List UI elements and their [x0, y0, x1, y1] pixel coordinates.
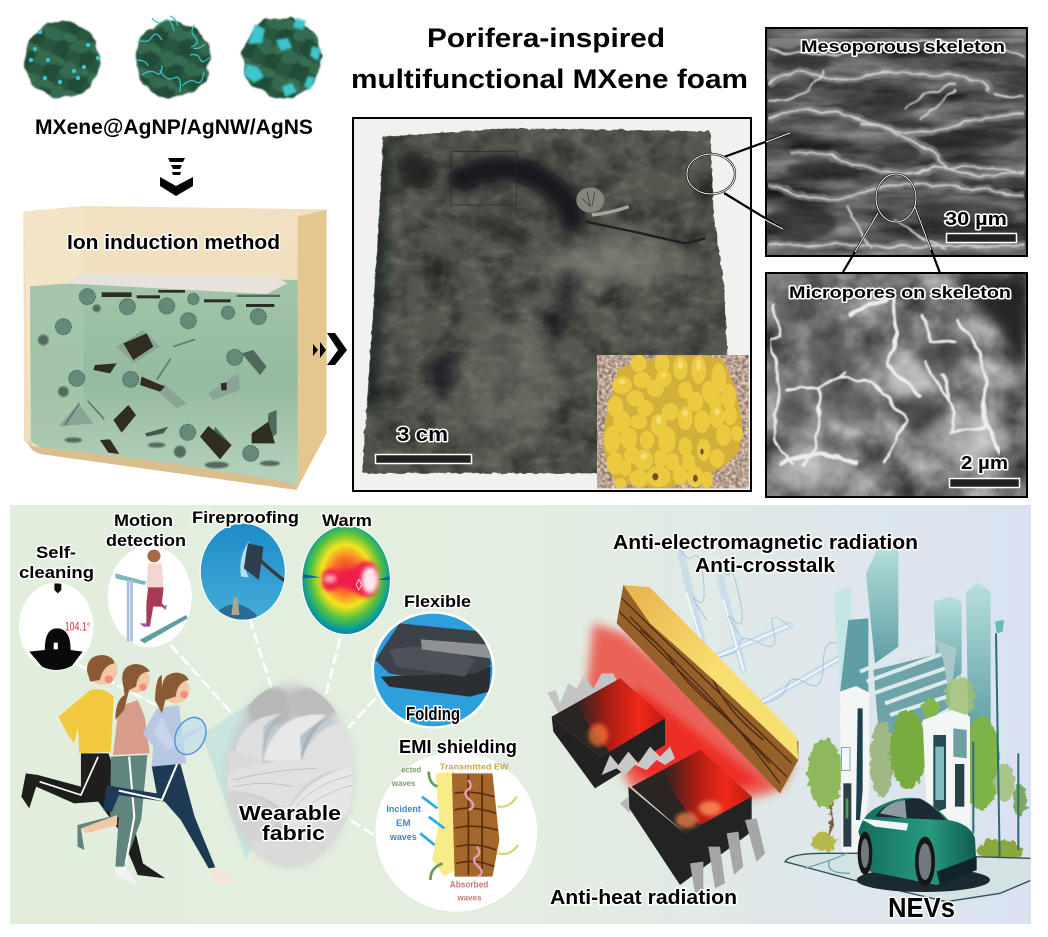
labels: wearable functions	[19, 508, 517, 845]
label: Anti-heat radiation: Anti-heat radiation	[550, 887, 737, 909]
heading: Mesoporous skeleton: Mesoporous skeleton	[801, 37, 1005, 56]
arrow: tank to foam	[313, 333, 347, 365]
scale bar: 30 µm: 30 µm	[945, 209, 1007, 229]
label: Warm: Warm	[322, 511, 372, 530]
charger 1	[840, 686, 869, 853]
title: Porifera-inspired	[427, 23, 665, 53]
label: Wearable fabric: Wearable	[239, 803, 341, 825]
icon: runner in pink	[77, 664, 150, 885]
circle: EMI shielding diagram	[375, 752, 537, 912]
title	[351, 23, 748, 94]
diagram: ion induction tank	[23, 206, 327, 490]
circle: EMI shielding diagram: ected	[401, 765, 421, 775]
runners and circles	[19, 523, 537, 912]
scale bar: 3 cm: 3 cm	[397, 424, 448, 446]
label: Anti-electromagnetic radiation: Anti-crosstalk	[695, 555, 836, 577]
label: EMI shielding: EMI shielding	[399, 737, 517, 757]
red heat glow	[587, 623, 793, 800]
icon: chip 1	[547, 673, 675, 788]
callout: zoom circles and lines	[687, 133, 940, 273]
inset: sponge photograph	[597, 353, 749, 489]
circle: EMI shielding diagram: EM	[396, 818, 411, 829]
panel: synthesis (spheres and tank)	[23, 16, 347, 490]
circle: EMI shielding diagram: waves	[391, 778, 416, 788]
circle: self-cleaning contact angle	[19, 583, 93, 671]
icon: wearable fabric bundle	[225, 685, 360, 870]
ground	[785, 853, 1032, 902]
cone: magnified region	[202, 703, 280, 860]
label: Wearable fabric: fabric	[262, 823, 325, 845]
circle: EMI shielding diagram: Incident	[386, 804, 422, 815]
icon: shielding foam layer	[617, 585, 798, 793]
circle: EMI shielding diagram: waves	[389, 832, 417, 843]
label: Fireproofing: Fireproofing	[192, 508, 299, 527]
circle: EMI shielding diagram: Absorbed	[450, 879, 488, 889]
EM waves	[677, 543, 863, 703]
icon: MXene@AgNS sphere	[242, 18, 322, 98]
panel: wearable fabric applications	[19, 523, 537, 912]
label: NEVs: NEVs	[888, 892, 955, 923]
icon: MXene@AgNW sphere	[134, 16, 210, 98]
scale bar: 30 µm	[945, 209, 1016, 242]
foam sheet	[362, 128, 729, 473]
circle: warm thermal image	[301, 525, 391, 635]
heading: MXene@AgNP/AgNW/AgNS: MXene@AgNP/AgNW/AgNS	[35, 116, 313, 139]
scale bar: 2 µm: 2 µm	[961, 453, 1008, 473]
car	[858, 798, 977, 887]
heading: Micropores on skeleton: Micropores on skeleton	[789, 283, 1011, 302]
circle: motion detection treadmill	[108, 546, 192, 647]
circle: flexible folding	[371, 611, 495, 729]
circle: EMI shielding diagram: waves	[456, 893, 482, 903]
buildings	[833, 543, 991, 747]
label: Motion detection: detection	[106, 531, 186, 550]
label: Self-cleaning	[19, 543, 94, 582]
label: Motion detection	[106, 511, 186, 550]
label: Flexible: Flexible	[404, 592, 471, 611]
label: Motion detection: Motion	[114, 511, 173, 530]
label: Anti-electromagnetic radiation: Anti-electromagnetic radiation	[613, 532, 918, 554]
label: Self-cleaning: Self-	[36, 543, 76, 562]
title: multifunctional MXene foam	[351, 64, 748, 94]
icon: chip 2	[620, 750, 765, 893]
circle: fireproofing	[200, 523, 286, 622]
panel: SEM mesoporous skeleton	[763, 28, 1027, 256]
label: Folding: Folding	[406, 704, 460, 724]
icon: runner in yellow	[21, 655, 165, 878]
scale bar: 3 cm	[376, 424, 472, 464]
circle: self-cleaning contact angle: 104.1°	[65, 620, 90, 634]
trees	[808, 677, 1027, 861]
panel: applications background	[10, 505, 1031, 924]
illustration: city, charging station and EV	[785, 543, 1032, 902]
circle: EMI shielding diagram: Transmitted EW	[440, 761, 509, 771]
charger 2	[923, 710, 970, 830]
label: Wearable fabric	[239, 803, 341, 845]
panel: foam photograph	[353, 118, 751, 491]
label: Anti-electromagnetic radiation	[613, 532, 918, 577]
label: Self-cleaning: cleaning	[19, 563, 94, 582]
heading: Ion induction method: Ion induction method	[67, 232, 280, 254]
icon: runner in light blue	[103, 673, 238, 883]
connector lines	[76, 618, 375, 835]
panel: electronics shielding	[547, 543, 863, 893]
icon: MXene@AgNP sphere	[24, 22, 100, 98]
arrow: down to tank	[160, 158, 193, 196]
scale bar: 2 µm	[950, 453, 1020, 488]
panel: SEM micropores on skeleton	[766, 273, 1027, 497]
